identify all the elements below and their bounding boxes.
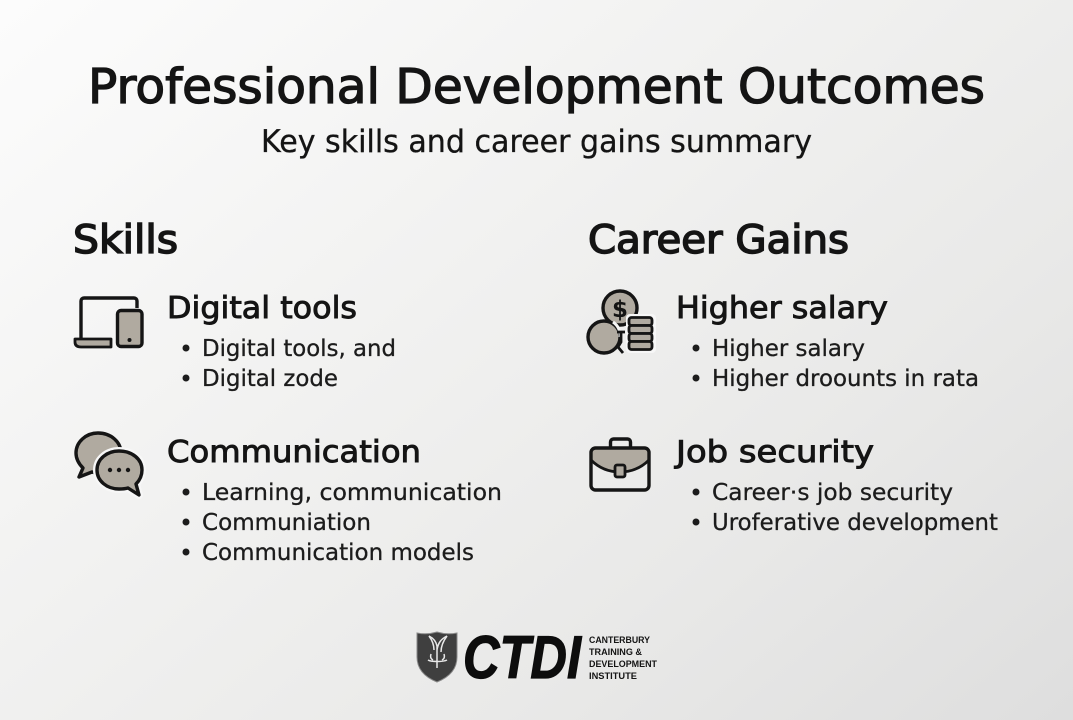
- subtitle: Key skills and career gains summary: [261, 124, 812, 160]
- institute name: DEVELOPMENT: [589, 659, 657, 669]
- bullet list: digital tools: Digital zode: [202, 364, 338, 392]
- bullet list: communication: Learning, communication: [202, 478, 502, 506]
- icon: laptop and phone: [75, 298, 142, 347]
- institute name: TRAINING &: [589, 647, 642, 657]
- wordmark: CTDI: [463, 624, 582, 691]
- institute name: INSTITUTE: [589, 671, 637, 681]
- item heading: communication: Communication: [167, 435, 421, 470]
- icon: speech bubbles: [76, 433, 142, 495]
- bullet list: job security: Career·s job security: [712, 478, 953, 506]
- institute name: CANTERBURY: [589, 635, 651, 645]
- icon: briefcase: [591, 439, 649, 490]
- logo: CTDI: [417, 624, 657, 691]
- bullet list: digital tools: Digital tools, and: [202, 334, 396, 362]
- bullet list: job security: Uroferative development: [712, 508, 998, 536]
- icon: shield: [417, 632, 457, 682]
- icon: coins and stack: $: [612, 297, 628, 323]
- icon: coins and stack: [588, 291, 656, 353]
- panel: career gains: [588, 218, 998, 536]
- bullet list: higher salary: Higher salary: [712, 334, 865, 362]
- bullet list: digital tools: [182, 334, 396, 392]
- bullet list: job security: [692, 478, 998, 536]
- bullet list: higher salary: [692, 334, 979, 392]
- item heading: higher salary: Higher salary: [676, 291, 888, 326]
- title: Professional Development Outcomes: [88, 59, 985, 115]
- panel: skills: [73, 218, 502, 566]
- item heading: digital tools: Digital tools: [167, 291, 357, 326]
- bullet list: higher salary: Higher droounts in rata: [712, 364, 979, 392]
- bullet list: communication: Communication models: [202, 538, 474, 566]
- bullet list: communication: Communiation: [202, 508, 371, 536]
- institute name: [589, 635, 657, 681]
- heading: skills: Skills: [73, 218, 178, 263]
- item heading: job security: Job security: [674, 435, 874, 470]
- heading: career gains: Career Gains: [588, 218, 849, 263]
- bullet list: communication: [182, 478, 502, 566]
